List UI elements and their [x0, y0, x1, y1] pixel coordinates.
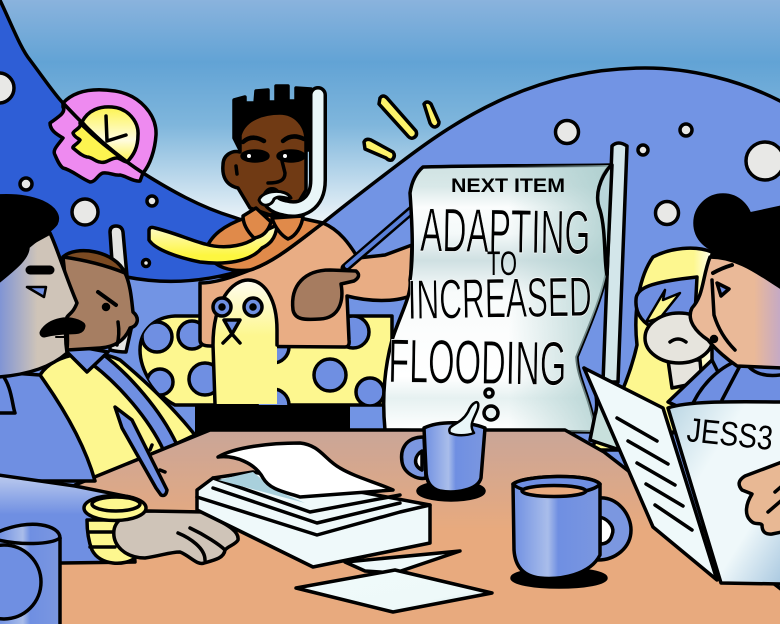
loose sheet under stack	[345, 551, 460, 573]
scroll headline: INCREASED	[407, 265, 592, 331]
snorkel	[259, 95, 318, 209]
yellow sun rays	[364, 96, 439, 160]
paper stack	[197, 443, 430, 567]
scroll headline: FLOODING	[388, 327, 567, 399]
presenter hair	[234, 86, 311, 150]
grey post behind second man	[110, 226, 127, 276]
steam bubbles	[484, 389, 498, 420]
second man yellow sweater	[40, 345, 195, 482]
presenter hand	[293, 270, 359, 319]
back coffee mug	[402, 402, 485, 500]
second man head	[63, 251, 137, 352]
newspaper	[584, 368, 780, 584]
scroll banner	[384, 165, 612, 432]
front coffee mug	[512, 476, 631, 587]
scroll headline: TO	[487, 245, 517, 283]
front cup left edge	[0, 524, 60, 624]
woman with buns	[690, 195, 780, 410]
table	[0, 430, 780, 624]
scroll headline: ADAPTING	[420, 196, 591, 268]
presenter body	[200, 215, 412, 347]
scroll pole	[603, 143, 627, 382]
loose sheet on table	[296, 570, 492, 612]
black shadow under float	[195, 406, 350, 436]
scroll pre-heading: NEXT ITEM	[451, 176, 565, 197]
pointer stick highlight	[347, 199, 425, 266]
dark blue wave	[0, 0, 323, 281]
bubbles on dark wave	[0, 73, 157, 266]
pointer stick	[345, 197, 427, 268]
hand holding newspaper	[739, 462, 780, 534]
wristwatch band	[87, 520, 135, 563]
girl in blue headband	[590, 248, 722, 450]
presenter head	[223, 113, 306, 215]
front man shirt and arm	[0, 372, 135, 563]
bird float head	[213, 280, 277, 404]
icon: sun clock with reflection	[50, 90, 156, 182]
scroll headline	[388, 196, 592, 399]
yellow necktie	[149, 225, 277, 263]
hand on table	[114, 511, 238, 564]
front man head	[0, 196, 81, 377]
wrist band lines	[88, 532, 115, 547]
shirt collar	[243, 208, 303, 239]
pen	[115, 407, 167, 495]
wristwatch face	[84, 496, 146, 520]
bubbles on periwinkle wave	[556, 120, 780, 224]
pool float with spots	[138, 314, 394, 407]
